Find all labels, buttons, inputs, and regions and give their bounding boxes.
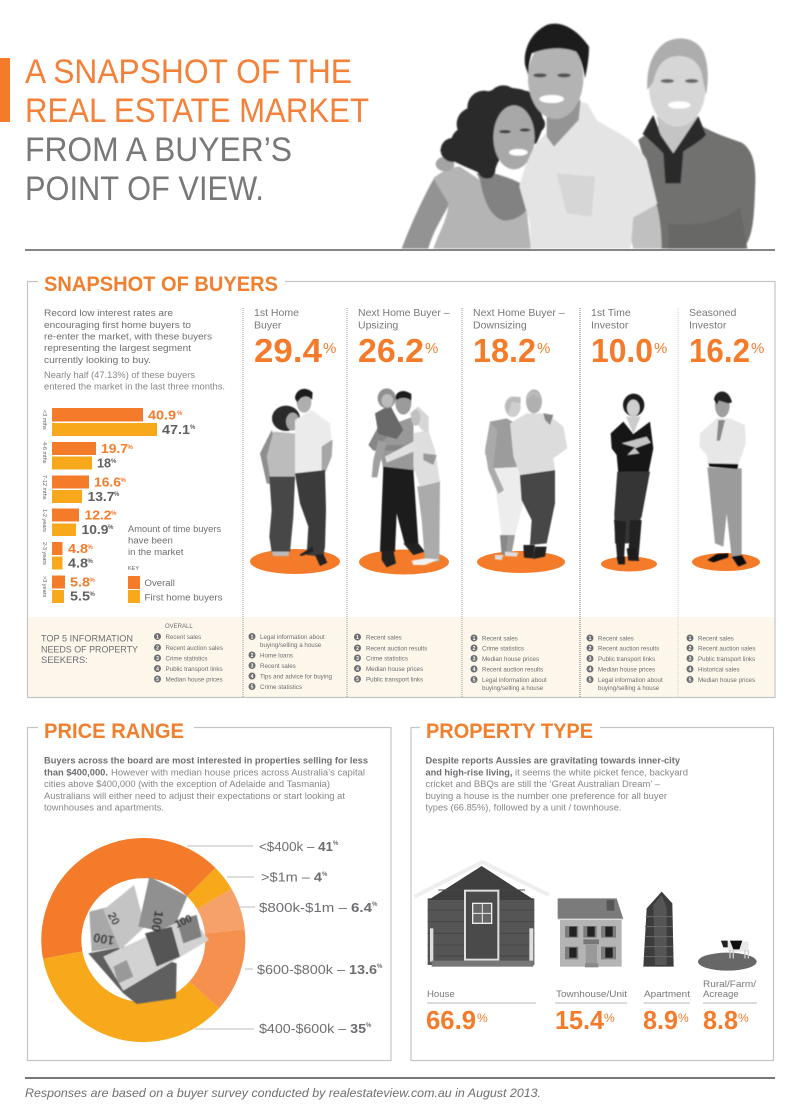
title bbox=[25, 53, 369, 208]
top 5 list: upsizing bbox=[354, 634, 427, 684]
column: 1st time investor: 10.0 bbox=[591, 332, 653, 369]
icon: cow on land bbox=[698, 941, 757, 971]
stat: rural bbox=[703, 979, 757, 1035]
top 5 list: seasoned investor: Median house prices bbox=[698, 677, 755, 684]
top 5 list: 1st time investor: 2 bbox=[589, 646, 592, 652]
column: 1st time investor: % bbox=[654, 340, 667, 357]
top 5 list: downsizing: 2 bbox=[473, 646, 476, 652]
stat: apartment bbox=[643, 989, 690, 1035]
top 5 list: 1st time investor: Legal information about bbox=[598, 677, 663, 684]
icon: apartment tower bbox=[643, 892, 674, 967]
column: 1st home buyer bbox=[254, 307, 336, 369]
column: next home buyer upsizing: Next Home Buyer – bbox=[358, 307, 450, 319]
top 5 list: seasoned investor: 5 bbox=[689, 677, 692, 683]
top 5 list: 1st home buyer: Tips and advice for buying bbox=[260, 674, 333, 680]
title: FROM A BUYER’S bbox=[25, 131, 292, 169]
bar chart: time in market: % bbox=[90, 592, 96, 598]
column: 1st home buyer: % bbox=[323, 340, 336, 357]
column: next home buyer upsizing: Upsizing bbox=[358, 320, 398, 332]
column: next home buyer downsizing: 18.2 bbox=[473, 332, 536, 369]
bar chart: time in market: 2-3 years bbox=[41, 542, 47, 565]
top 5 list: overall: Recent auction sales bbox=[166, 645, 223, 652]
bar chart: time in market: 1-2 years bbox=[41, 509, 47, 532]
chart caption and key bbox=[128, 524, 223, 604]
header rule bbox=[25, 249, 775, 251]
chart caption and key: have been bbox=[128, 536, 173, 546]
bar chart: time in market: 16.6 bbox=[94, 476, 121, 490]
icon: bank notes: 100 bbox=[148, 909, 166, 933]
top 5 list: upsizing: 1 bbox=[356, 635, 359, 641]
stat: apartment: 8.9 bbox=[643, 1005, 678, 1035]
top 5 list: 1st time investor: Recent sales bbox=[598, 636, 634, 642]
chart caption and key: Overall bbox=[144, 578, 175, 589]
column: 1st time investor: Investor bbox=[591, 320, 629, 332]
bar chart: time in market: >3 years bbox=[41, 576, 47, 597]
top 5 list: overall: 3 bbox=[156, 656, 159, 662]
top 5 information needs: label: SEEKERS: bbox=[41, 654, 88, 665]
icon: house bbox=[414, 862, 549, 967]
price range text: cities above $400,000 (with the exception of Adelaide and Tasmania) bbox=[44, 779, 330, 790]
footer note: Responses are based on a buyer survey conducted by realestateview.com.au in August 2013. bbox=[25, 1086, 541, 1100]
bar chart: time in market: 4.8 bbox=[68, 556, 88, 570]
top 5 list: 1st time investor: 4 bbox=[589, 667, 592, 673]
price range text: Buyers across the board are most interested in properties selling for less bbox=[44, 756, 368, 766]
price range text: townhouses and apartments. bbox=[44, 802, 164, 814]
title: POINT OF VIEW. bbox=[25, 170, 264, 208]
bar chart: time in market: 4.8 bbox=[68, 542, 88, 556]
label: 800k to 1m: $800k-$1m – 6.4 bbox=[259, 901, 372, 915]
top 5 list: 1st home buyer bbox=[248, 633, 333, 691]
stat: townhouse: Townhouse/Unit bbox=[556, 989, 627, 1000]
top 5 list: upsizing: 3 bbox=[356, 656, 359, 662]
column: next home buyer downsizing bbox=[473, 307, 565, 369]
top 5 list: 1st time investor: 5 bbox=[589, 677, 592, 683]
top 5 list: overall: OVERALL bbox=[165, 624, 193, 630]
top 5 list: 1st home buyer: 2 bbox=[251, 653, 254, 659]
icon: townhouse bbox=[558, 898, 623, 967]
bar chart: time in market: % bbox=[111, 511, 117, 517]
icon: bank notes: 100 bbox=[92, 930, 116, 947]
stat: apartment: % bbox=[678, 1011, 689, 1025]
orange accent bar bbox=[0, 58, 10, 122]
label: 600k to 800k: % bbox=[377, 964, 383, 970]
top 5 list: upsizing: 2 bbox=[356, 646, 359, 652]
bar chart: time in market: % bbox=[90, 578, 96, 584]
bar chart: time in market: 47.1 bbox=[162, 423, 190, 437]
stat: rural: Acreage bbox=[703, 989, 739, 1000]
bar chart: time in market: % bbox=[120, 478, 126, 484]
label: 600k to 800k: $600-$800k – 13.6 bbox=[257, 963, 377, 977]
icon: bank notes: 100 bbox=[173, 913, 194, 931]
intro text: entered the market in the last three months. bbox=[44, 382, 225, 392]
top 5 list: overall: 1 bbox=[156, 634, 159, 640]
column: 1st time investor bbox=[591, 307, 667, 369]
column: seasoned investor: Seasoned bbox=[689, 307, 736, 319]
bar chart: time in market: <3 mths bbox=[41, 410, 47, 430]
price range text: Australians will either need to adjust their expectations or start looking at bbox=[44, 791, 345, 802]
bar chart: time in market: % bbox=[128, 445, 134, 451]
property type text bbox=[426, 756, 688, 814]
property type text: buying a house is the number one preference for all buyer bbox=[426, 791, 668, 802]
top 5 list: upsizing: Median house prices bbox=[366, 666, 423, 673]
bar chart: time in market: 4-6 mths bbox=[41, 442, 47, 464]
price range text bbox=[44, 756, 368, 814]
panel: property type bbox=[411, 720, 774, 1060]
top 5 list: 1st time investor: Recent auction results bbox=[598, 646, 659, 652]
top 5 list: 1st home buyer: 5 bbox=[251, 684, 254, 690]
stat: townhouse: % bbox=[604, 1011, 615, 1025]
intro text: Nearly half (47.13%) of these buyers bbox=[44, 370, 195, 381]
intro text bbox=[44, 308, 225, 392]
top 5 list: seasoned investor: Recent auction sales bbox=[698, 646, 755, 652]
top 5 list: upsizing: Crime statistics bbox=[366, 656, 408, 662]
heading: snapshot of buyers: SNAPSHOT OF BUYERS bbox=[44, 273, 278, 296]
top 5 list: overall: Crime statistics bbox=[166, 656, 207, 662]
column: seasoned investor bbox=[689, 307, 764, 369]
column: next home buyer upsizing: 26.2 bbox=[358, 332, 424, 369]
bar chart: time in market: 19.7 bbox=[101, 442, 128, 456]
column: next home buyer downsizing: Next Home Buyer – bbox=[473, 307, 565, 319]
column: next home buyer downsizing: Downsizing bbox=[473, 320, 527, 332]
donut chart: price range bbox=[41, 838, 245, 1042]
top 5 list: seasoned investor: 2 bbox=[689, 646, 692, 652]
icon: bank notes bbox=[88, 877, 209, 1004]
top 5 list: upsizing: Recent sales bbox=[366, 634, 402, 642]
top 5 information needs: label: TOP 5 INFORMATION bbox=[41, 632, 133, 644]
top 5 list: upsizing: 5 bbox=[356, 677, 359, 683]
top 5 information needs: label: NEEDS OF PROPERTY bbox=[41, 644, 139, 654]
label: under 400k: <$400k – 41 bbox=[259, 840, 333, 854]
label: over 1m: >$1m – 4 bbox=[261, 870, 322, 884]
icon: bank notes: 20 bbox=[105, 910, 121, 927]
bar chart: time in market: 5.8 bbox=[70, 576, 90, 590]
stat: rural: Rural/Farm/ bbox=[703, 979, 756, 990]
chart caption and key: KEY bbox=[128, 566, 139, 572]
bar chart: time in market: 12.2 bbox=[84, 508, 112, 522]
label: 400k to 600k: % bbox=[366, 1023, 372, 1029]
top 5 list: seasoned investor: 4 bbox=[689, 667, 692, 673]
chart caption and key: Amount of time buyers bbox=[128, 524, 221, 535]
top 5 list: 1st home buyer: Home loans bbox=[260, 652, 293, 660]
top 5 list: downsizing: Crime statistics bbox=[482, 646, 524, 652]
column: seasoned investor: Investor bbox=[689, 320, 727, 332]
top 5 list: overall: Recent sales bbox=[166, 634, 201, 641]
intro text: representing the largest segment bbox=[44, 343, 191, 354]
top 5 list: 1st home buyer: 1 bbox=[251, 634, 254, 640]
top 5 list: downsizing: buying/selling a house bbox=[482, 685, 544, 692]
top 5 list: downsizing: Recent sales bbox=[482, 636, 518, 642]
top 5 list: seasoned investor bbox=[686, 634, 755, 684]
top 5 list: 1st time investor: 3 bbox=[589, 656, 592, 662]
photo: woman in black bbox=[611, 394, 653, 564]
top 5 list: downsizing bbox=[470, 634, 547, 692]
top 5 list: 1st time investor bbox=[586, 634, 663, 692]
chart caption and key: in the market bbox=[128, 547, 184, 558]
top 5 list: seasoned investor: 1 bbox=[689, 636, 692, 642]
intro text: re-enter the market, with these buyers bbox=[44, 332, 212, 342]
photo: man in shirt and tie bbox=[699, 391, 747, 567]
top 5 list: seasoned investor: 3 bbox=[689, 656, 692, 662]
bar chart: time in market: 5.5 bbox=[70, 590, 90, 604]
stat: house bbox=[426, 989, 536, 1035]
bar chart: time in market: 40.9 bbox=[148, 408, 176, 422]
heading: price range: PRICE RANGE bbox=[44, 720, 184, 743]
top 5 list: overall: 4 bbox=[156, 666, 159, 672]
column: next home buyer upsizing: % bbox=[425, 340, 438, 357]
donut leader lines bbox=[187, 846, 255, 1029]
top 5 list: 1st home buyer: 3 bbox=[251, 663, 254, 669]
top 5 list: upsizing: 4 bbox=[356, 666, 359, 672]
property type text: Despite reports Aussies are gravitating towards inner-city bbox=[426, 756, 681, 766]
top 5 list: downsizing: Recent auction results bbox=[482, 666, 543, 674]
label: under 400k: % bbox=[333, 841, 339, 847]
photo: older couple bbox=[485, 396, 527, 560]
column: seasoned investor: % bbox=[751, 340, 764, 357]
title: A SNAPSHOT OF THE bbox=[25, 53, 352, 91]
top 5 list: 1st time investor: buying/selling a house bbox=[598, 685, 660, 692]
photo: young couple bbox=[260, 389, 333, 566]
stat: rural: % bbox=[738, 1011, 749, 1025]
property type text: cricket and BBQs are still the ‘Great Australian Dream’ – bbox=[426, 779, 661, 790]
bar chart: time in market: % bbox=[108, 525, 114, 531]
stat: apartment: Apartment bbox=[644, 989, 690, 1000]
bar chart: time in market: % bbox=[190, 425, 196, 431]
bar chart: time in market: 13.7 bbox=[88, 490, 115, 504]
top 5 list: downsizing: Median house prices bbox=[482, 656, 539, 663]
label: 800k to 1m: % bbox=[372, 902, 378, 908]
bar chart: time in market: 18 bbox=[97, 456, 111, 470]
price range text: However with median house prices across Australia’s capital bbox=[111, 768, 365, 778]
top 5 list: seasoned investor: Public transport links bbox=[698, 656, 755, 663]
column: next home buyer downsizing: % bbox=[537, 340, 550, 357]
top 5 list: downsizing: 1 bbox=[473, 636, 476, 642]
orange floor ellipses bbox=[250, 549, 760, 574]
top 5 list: overall: 2 bbox=[156, 645, 159, 651]
bar chart: time in market: % bbox=[88, 559, 94, 565]
top 5 list: overall bbox=[154, 624, 223, 684]
column: 1st home buyer: 1st Home bbox=[254, 307, 299, 319]
top 5 list: 1st time investor: Public transport links bbox=[598, 656, 655, 663]
top 5 list: downsizing: Legal information about bbox=[482, 677, 547, 684]
top 5 list: 1st home buyer: 4 bbox=[251, 674, 254, 680]
title: REAL ESTATE MARKET bbox=[25, 92, 369, 130]
top 5 information needs: label bbox=[41, 632, 139, 665]
bar chart: time in market: % bbox=[114, 492, 120, 498]
panel: snapshot of buyers bbox=[28, 273, 775, 698]
top 5 list: seasoned investor: Historical sales bbox=[698, 666, 740, 674]
top 5 list: downsizing: 3 bbox=[473, 656, 476, 662]
column: 1st home buyer: 29.4 bbox=[254, 332, 323, 369]
property type text: it seems the white picket fence, backyard bbox=[515, 768, 688, 778]
older man bbox=[638, 38, 755, 249]
bar chart: time in market: % bbox=[88, 545, 94, 551]
top 5 list: upsizing: Public transport links bbox=[366, 676, 423, 684]
bar chart: time in market: 7-12 mths bbox=[41, 475, 47, 500]
panel: price range bbox=[28, 720, 391, 1060]
stat: house: % bbox=[477, 1011, 488, 1025]
stat: rural: 8.8 bbox=[703, 1005, 738, 1035]
stat: townhouse bbox=[555, 989, 627, 1035]
photo: family with child bbox=[368, 388, 440, 567]
bar chart: time in market: % bbox=[177, 411, 183, 417]
intro text: Record low interest rates are bbox=[44, 308, 173, 319]
top 5 list: overall: Public transport links bbox=[166, 666, 223, 673]
top 5 list: overall: 5 bbox=[156, 677, 159, 683]
label: 400k to 600k: $400-$600k – 35 bbox=[259, 1022, 366, 1036]
top 5 list: overall: Median house prices bbox=[166, 676, 223, 684]
stat: townhouse: 15.4 bbox=[555, 1005, 605, 1035]
label: over 1m: % bbox=[322, 872, 328, 878]
column: 1st time investor: 1st Time bbox=[591, 307, 631, 319]
woman bbox=[402, 85, 545, 249]
top 5 list: seasoned investor: Recent sales bbox=[698, 636, 734, 642]
column: 1st home buyer: Buyer bbox=[254, 320, 282, 332]
property type text: types (66.85%), followed by a unit / townhouse. bbox=[426, 802, 622, 814]
top 5 list: upsizing: Recent auction results bbox=[366, 646, 427, 652]
heading: property type: PROPERTY TYPE bbox=[426, 720, 593, 743]
intro text: currently looking to buy. bbox=[44, 355, 151, 366]
top 5 list: 1st time investor: Median house prices bbox=[598, 666, 655, 674]
intro text: encouraging first home buyers to bbox=[44, 320, 191, 331]
column: seasoned investor: 16.2 bbox=[689, 332, 750, 369]
chart caption and key: First home buyers bbox=[144, 592, 223, 604]
column: next home buyer upsizing bbox=[358, 307, 450, 369]
top 5 list: downsizing: 4 bbox=[473, 667, 476, 673]
bar chart: time in market: 10.9 bbox=[82, 523, 109, 537]
hero photo: three smiling people bbox=[402, 24, 755, 249]
top 5 list: 1st home buyer: Legal information about bbox=[260, 634, 325, 641]
top 5 list: 1st time investor: 1 bbox=[589, 636, 592, 642]
property type text: and high-rise living, bbox=[426, 768, 513, 778]
bar chart: time in market bbox=[41, 408, 196, 604]
top 5 list: downsizing: 5 bbox=[473, 677, 476, 683]
bar chart: time in market: % bbox=[111, 459, 117, 465]
stat: house: House bbox=[427, 989, 455, 1000]
top 5 list: 1st home buyer: buying/selling a house bbox=[260, 642, 322, 649]
top 5 list: 1st home buyer: Recent sales bbox=[260, 663, 296, 670]
stat: house: 66.9 bbox=[426, 1005, 476, 1035]
top 5 list: 1st home buyer: Crime statistics bbox=[260, 684, 302, 691]
panel background: top 5 band bbox=[28, 617, 775, 697]
young man bbox=[519, 24, 662, 249]
footer rule bbox=[25, 1077, 775, 1079]
price range text: than $400,000. bbox=[44, 768, 108, 778]
